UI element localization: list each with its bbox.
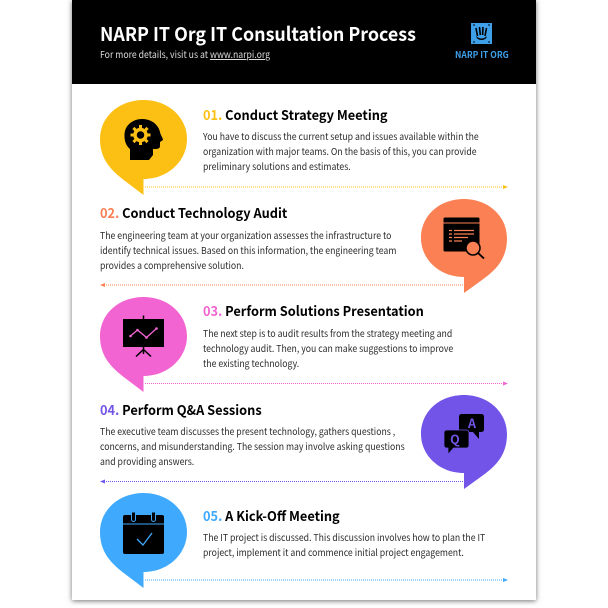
step 2 text: identify technical issues. Based on this information, the engineering team (100, 243, 396, 257)
step 4 text (100, 424, 405, 468)
bubble 2 with window search icon (421, 199, 507, 293)
title: NARP IT Org IT Consultation Process (100, 20, 416, 47)
step 2 text (100, 228, 396, 272)
bubble 1 with head gear icon (100, 100, 187, 195)
step 1 heading: 01. Conduct Strategy Meeting (203, 104, 388, 124)
icon: Q and A speech bubbles: A (467, 413, 477, 432)
icon: head with gear (124, 119, 163, 160)
step 4 heading: 04. Perform Q&A Sessions (100, 399, 262, 419)
step 5 text: The IT project is discussed. This discussion involves how to plan the IT (203, 530, 485, 544)
step 1 text: preliminary solutions and estimates. (203, 159, 351, 173)
bubble 4 with Q and A icon (421, 395, 507, 489)
icon: calendar check (123, 512, 164, 554)
step 1 text: organization with major teams. On the basis of this, you can provide (203, 144, 477, 158)
bubble 3 with presentation board icon (100, 297, 187, 392)
arrow 1 (145, 185, 508, 189)
logo label: NARP IT ORG (454, 48, 508, 61)
icon: Q and A speech bubbles (444, 413, 484, 454)
step 1 text: You have to discuss the current setup and issues available within the (203, 129, 479, 143)
arrow 3 (145, 382, 508, 386)
step 3 text: technology audit. Then, you can make suggestions to improve (203, 341, 453, 355)
step 2 text: provides a comprehensive solution. (100, 258, 244, 272)
step 5 text (203, 530, 485, 559)
step 5 text: project, implement it and commence initial project engagement. (203, 545, 464, 559)
step 3 heading: 03. Perform Solutions Presentation (203, 300, 424, 320)
step 4 text: The executive team discusses the present technology, gathers questions , (100, 424, 395, 438)
icon: window with magnifier (444, 218, 484, 258)
page panel (72, 0, 536, 600)
arrow 5 (145, 578, 508, 582)
step 1 text (203, 129, 479, 173)
step 4 text: concerns, and misunderstanding. The session may involve asking questions (100, 439, 405, 453)
header band (72, 0, 536, 84)
step 5 heading: 05. A Kick-Off Meeting (203, 505, 340, 525)
icon: logo hand (471, 23, 492, 44)
step 2 text: The engineering team at your organization assesses the infrastructure to (100, 228, 391, 242)
step 4 text: and providing answers. (100, 454, 194, 468)
step 3 text: the existing technology. (203, 356, 299, 370)
icon: Q and A speech bubbles: Q (450, 429, 460, 448)
step 3 text (203, 326, 453, 370)
bubble 5 with calendar icon (100, 493, 187, 588)
icon: presentation board (123, 316, 164, 356)
arrow 4 (100, 480, 463, 484)
step 2 heading: 02. Conduct Technology Audit (100, 202, 287, 222)
subtitle: For more details, visit us at www.narpi.org (100, 47, 270, 61)
step 3 text: The next step is to audit results from the strategy meeting and (203, 326, 452, 340)
arrow 2 (100, 283, 463, 287)
